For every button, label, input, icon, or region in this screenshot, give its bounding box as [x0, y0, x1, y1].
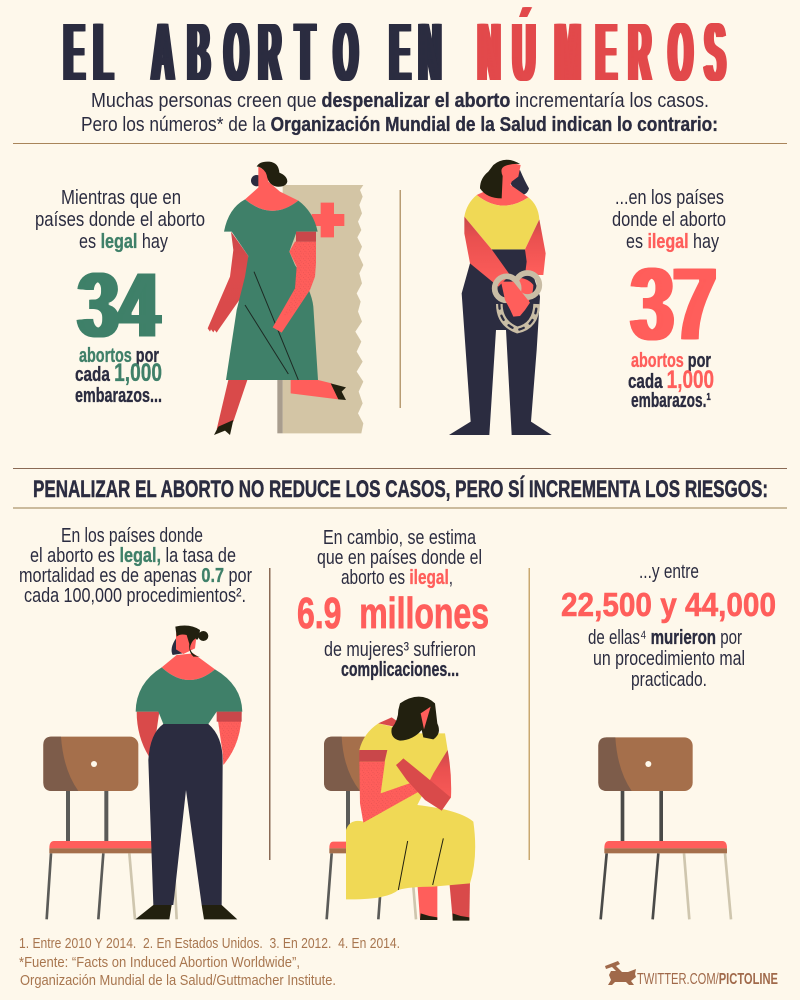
hand behind cuffs — [513, 278, 533, 307]
subtitle: Pero los números* de la Organización Mundial de la Salud indican lo contrario: — [81, 114, 718, 136]
credit: TWITTER.COM/PICTOLINE — [637, 971, 778, 988]
text block: deaths: 22,500 y 44,000 — [561, 586, 776, 623]
arm behind dress — [208, 232, 248, 333]
text block: legal abortion statistic: es legal hay — [79, 231, 168, 253]
text block: illegal abortion statistic: cada 1,000 — [628, 366, 714, 394]
footnotes — [19, 935, 400, 989]
upper arm right — [425, 750, 451, 811]
text block: illegal abortion statistic: es ilegal hay — [626, 231, 719, 253]
text block: legal abortion statistic: cada 1,000 — [75, 359, 162, 387]
illustration: empty chair — [598, 737, 731, 919]
legs and shoes — [217, 380, 247, 429]
clinic door panel — [283, 185, 363, 433]
dress — [346, 723, 475, 899]
dress fold lines — [245, 272, 298, 380]
forearm and hand — [396, 758, 451, 811]
face — [421, 707, 431, 729]
dress fold lines — [398, 838, 443, 890]
illustration: woman in handcuffs, illegal context — [449, 160, 552, 435]
hand in front — [501, 282, 530, 317]
text block: complications where illegal: de mujeres³ sufrieron — [324, 639, 476, 661]
text block: legal abortion statistic — [35, 187, 205, 407]
footnotes: 1. Entre 2010 Y 2014. 2. En Estados Unidos. 3. En 2012. 4. En 2014. — [19, 935, 400, 952]
text block: illegal abortion statistic: embarazos.¹ — [631, 390, 711, 412]
neck and chest — [162, 653, 215, 680]
shoes — [135, 905, 237, 919]
shirt — [136, 667, 242, 724]
arm in front of dress — [273, 232, 316, 333]
text block: deaths: ...y entre — [639, 561, 699, 583]
icon: pig logo — [605, 961, 636, 985]
text block: legal abortion statistic: Mientras que en — [61, 187, 181, 209]
illustration: chair and standing woman — [43, 626, 242, 919]
vertical divider — [269, 568, 270, 860]
pants — [148, 724, 223, 905]
text block: deaths: de ellas⁴ murieron por — [588, 627, 742, 649]
legs and shoes — [417, 883, 437, 919]
text block: complications where illegal: que en países donde el — [317, 547, 482, 569]
title — [64, 6, 725, 100]
hair — [480, 160, 520, 198]
text block: mortality where legal: cada 100,000 procedimientos². — [24, 585, 246, 607]
text block: illegal abortion statistic: ...en los países — [615, 187, 724, 209]
red cross — [312, 203, 344, 237]
subtitle — [81, 90, 718, 136]
text block: mortality where legal: el aborto es legal, la tasa de — [30, 545, 236, 567]
hair back — [251, 175, 262, 186]
text block: illegal abortion statistic: abortos por — [631, 350, 711, 372]
text block: mortality where legal: mortalidad es de apenas 0.7 por — [19, 565, 252, 587]
text block: complications where illegal: aborto es ilegal, — [341, 567, 453, 589]
arms — [137, 712, 159, 757]
text block: complications where illegal — [297, 527, 489, 681]
footnotes: *Fuente: “Facts on Induced Abortion Worldwide”, — [19, 954, 300, 971]
face and hair — [172, 626, 208, 657]
hair — [391, 697, 439, 741]
text block: complications where illegal: complicaciones... — [341, 659, 459, 681]
subtitle: Muchas personas creen que despenalizar el aborto incrementaría los casos. — [91, 90, 709, 112]
text block: legal abortion statistic: abortos por — [79, 345, 159, 367]
face — [499, 164, 521, 189]
arm left — [359, 750, 431, 823]
illustration: chair and seated woman — [324, 697, 475, 921]
title: NÚMEROS — [478, 6, 725, 100]
text block: legal abortion statistic: embarazos... — [75, 385, 162, 407]
text block: legal abortion statistic: 34 — [78, 253, 159, 357]
neck and chest — [477, 183, 528, 206]
face — [258, 167, 268, 188]
vertical divider — [528, 568, 530, 860]
text block: complications where illegal: 6.9 millones — [297, 589, 489, 638]
hair — [257, 162, 287, 187]
text block: illegal abortion statistic: donde el aborto — [612, 209, 726, 231]
neck and chest — [245, 182, 298, 211]
arms — [525, 219, 546, 275]
text block: illegal abortion statistic: 37 — [631, 247, 716, 363]
handcuffs — [495, 273, 539, 300]
text block: complications where illegal: En cambio, se estima — [323, 527, 477, 549]
chain — [499, 304, 537, 330]
text block: illegal abortion statistic — [612, 187, 726, 412]
shirt — [464, 195, 539, 249]
pants — [449, 249, 552, 435]
text block: legal abortion statistic: países donde el aborto — [35, 209, 205, 231]
footnotes: Organización Mundial de la Salud/Guttmacher Institute. — [20, 972, 336, 989]
vertical divider — [400, 190, 401, 408]
text block: deaths — [561, 561, 776, 691]
chair — [324, 737, 416, 919]
neck — [378, 717, 410, 730]
title: EL ABORTO EN — [64, 6, 441, 100]
illustration: woman in clinic, legal context — [208, 162, 363, 435]
hair back — [508, 170, 529, 195]
text block: deaths: un procedimiento mal — [593, 648, 745, 670]
text block: mortality where legal: En los países donde — [61, 525, 203, 547]
chair — [43, 737, 177, 919]
text block: mortality where legal — [19, 525, 252, 607]
text block: deaths: practicado. — [631, 669, 707, 691]
dress — [224, 199, 318, 380]
